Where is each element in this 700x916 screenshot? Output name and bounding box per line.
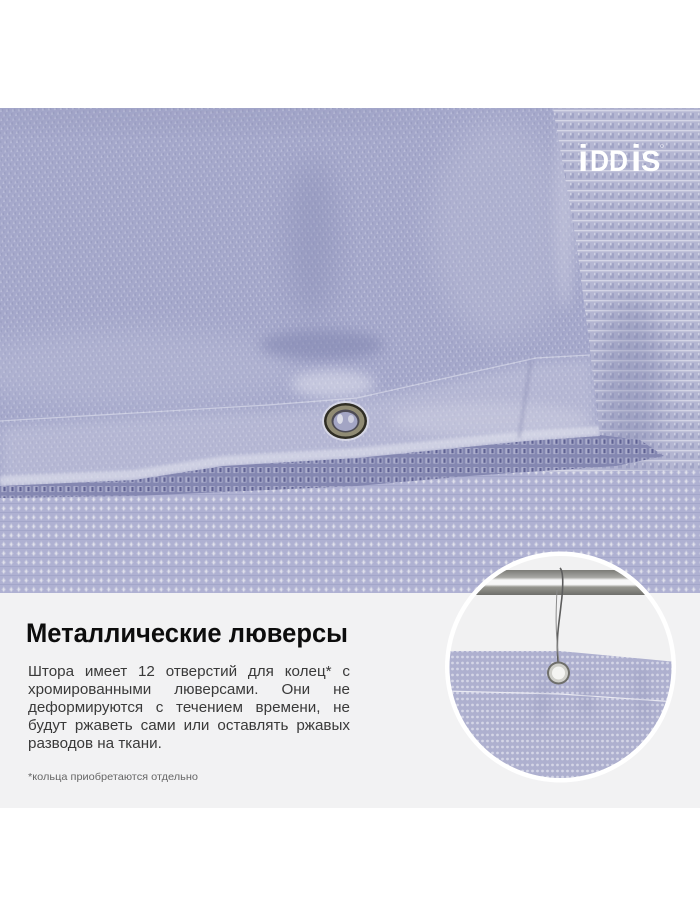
grommet bbox=[322, 401, 369, 441]
body text: Штора имеет 12 отверстий для колец* с bbox=[28, 663, 350, 680]
text panel background bbox=[0, 593, 700, 808]
hook bbox=[556, 568, 563, 662]
upper curtain fold bbox=[0, 108, 600, 486]
logo: IDDIS: DD bbox=[590, 145, 628, 178]
logo: IDDIS: i bbox=[631, 138, 641, 179]
inset circle: grommet on rod bbox=[445, 552, 677, 790]
body text: будут ржаветь сами или оставлять ржавых bbox=[28, 717, 350, 734]
heading: Металлические люверсы bbox=[26, 618, 348, 648]
fold shading bbox=[0, 90, 600, 486]
body text: хромированными люверсами. Они не bbox=[28, 681, 350, 698]
hem seam bbox=[519, 360, 531, 438]
body text: разводов на ткани. bbox=[28, 735, 162, 752]
hem fold line bbox=[0, 355, 590, 421]
small grommet bbox=[547, 662, 570, 684]
dark shadow band under the fold bbox=[0, 435, 664, 498]
logo: IDDIS: i bbox=[578, 138, 588, 179]
curtain in circle bbox=[450, 651, 672, 778]
logo: IDDIS: S bbox=[641, 146, 660, 178]
photo: curtain fabric with grommet bbox=[0, 90, 700, 593]
circle photo bbox=[450, 556, 672, 778]
circle white border bbox=[445, 552, 676, 782]
shower rod bbox=[476, 570, 645, 595]
logo: IDDIS bbox=[578, 138, 664, 179]
body text: деформируются с течением времени, не bbox=[28, 699, 350, 716]
curtain folds bbox=[540, 668, 645, 720]
body text bbox=[28, 663, 350, 752]
footnote: *кольца приобретаются отдельно bbox=[28, 771, 198, 783]
lower fabric layer bbox=[0, 100, 700, 593]
